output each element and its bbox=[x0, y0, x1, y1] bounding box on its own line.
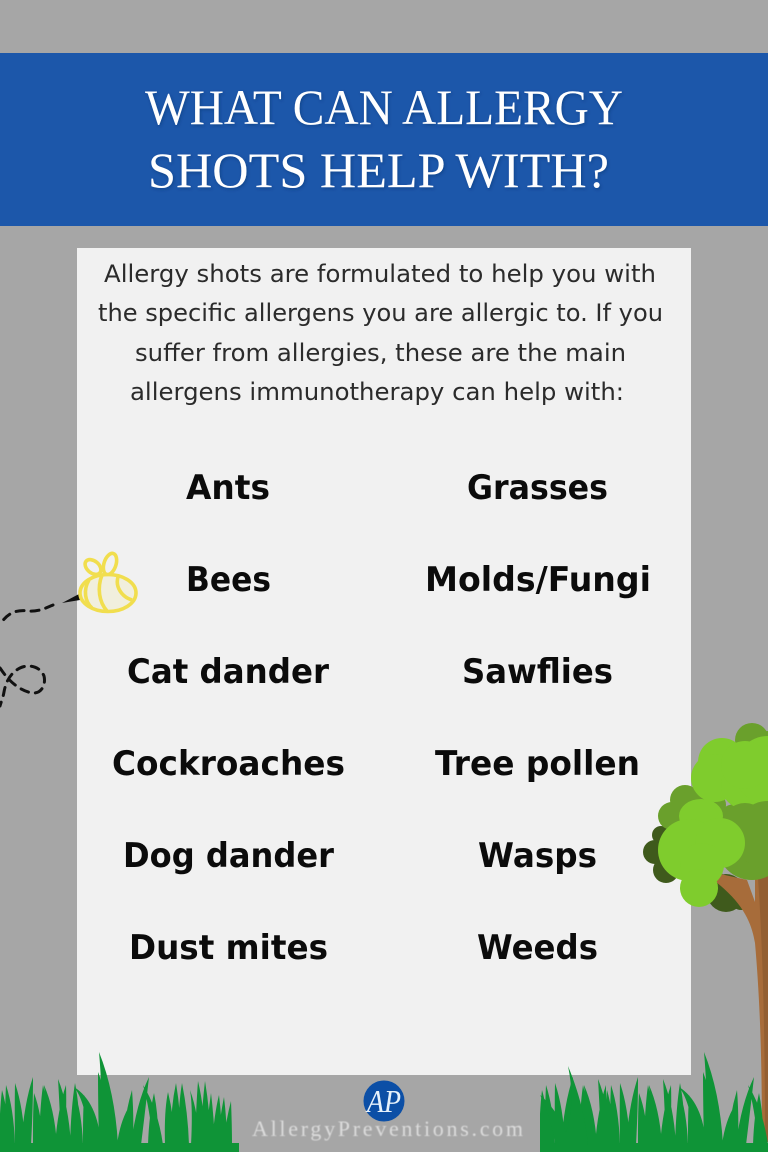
allergen list: right column: Wasps bbox=[478, 836, 597, 876]
title: SHOTS HELP WITH? bbox=[148, 142, 609, 198]
tree: trunk bbox=[716, 873, 768, 1142]
allergen list: right column bbox=[425, 468, 651, 968]
intro text: allergens immunotherapy can help with: bbox=[130, 378, 624, 406]
tree: light front foliage bbox=[658, 799, 745, 907]
title bbox=[145, 79, 623, 198]
tree: mid overlap bbox=[717, 801, 768, 880]
allergen list: left column: Bees bbox=[186, 560, 271, 600]
allergen list: left column: Cockroaches bbox=[112, 744, 345, 784]
allergen list: right column: Molds/Fungi bbox=[425, 560, 651, 600]
website URL: AllergyPreventions.com bbox=[252, 1116, 523, 1141]
flight path bbox=[0, 605, 53, 706]
logo: AP circle: AP bbox=[365, 1083, 401, 1119]
allergen list: left column: Dust mites bbox=[129, 928, 328, 968]
allergen list: right column: Weeds bbox=[477, 928, 598, 968]
tree: dark foliage bbox=[643, 826, 751, 912]
title banner bbox=[0, 53, 768, 226]
intro text bbox=[98, 260, 663, 406]
tree: mid foliage bbox=[658, 723, 768, 840]
allergen list: right column: Tree pollen bbox=[435, 744, 640, 784]
stinger bbox=[62, 594, 80, 603]
tree: light top foliage bbox=[691, 736, 768, 809]
icon: tree bbox=[643, 723, 768, 1142]
intro text: the specific allergens you are allergic to. If you bbox=[98, 299, 663, 327]
title: WHAT CAN ALLERGY bbox=[145, 79, 623, 135]
grass: left bbox=[0, 1052, 239, 1152]
icon: bee with dashed flight path bbox=[0, 552, 136, 706]
intro text: Allergy shots are formulated to help you with bbox=[104, 260, 656, 288]
allergen list: right column: Sawflies bbox=[462, 652, 613, 692]
allergen list: left column bbox=[112, 468, 345, 968]
grass: right bbox=[539, 1052, 768, 1152]
intro text: suffer from allergies, these are the main bbox=[135, 339, 626, 367]
panel: allergen list bbox=[77, 248, 691, 1075]
bee body bbox=[80, 552, 136, 612]
allergen list: left column: Dog dander bbox=[123, 836, 334, 876]
allergen list: left column: Cat dander bbox=[127, 652, 329, 692]
allergen list: right column: Grasses bbox=[467, 468, 608, 508]
allergen list: left column: Ants bbox=[186, 468, 270, 508]
